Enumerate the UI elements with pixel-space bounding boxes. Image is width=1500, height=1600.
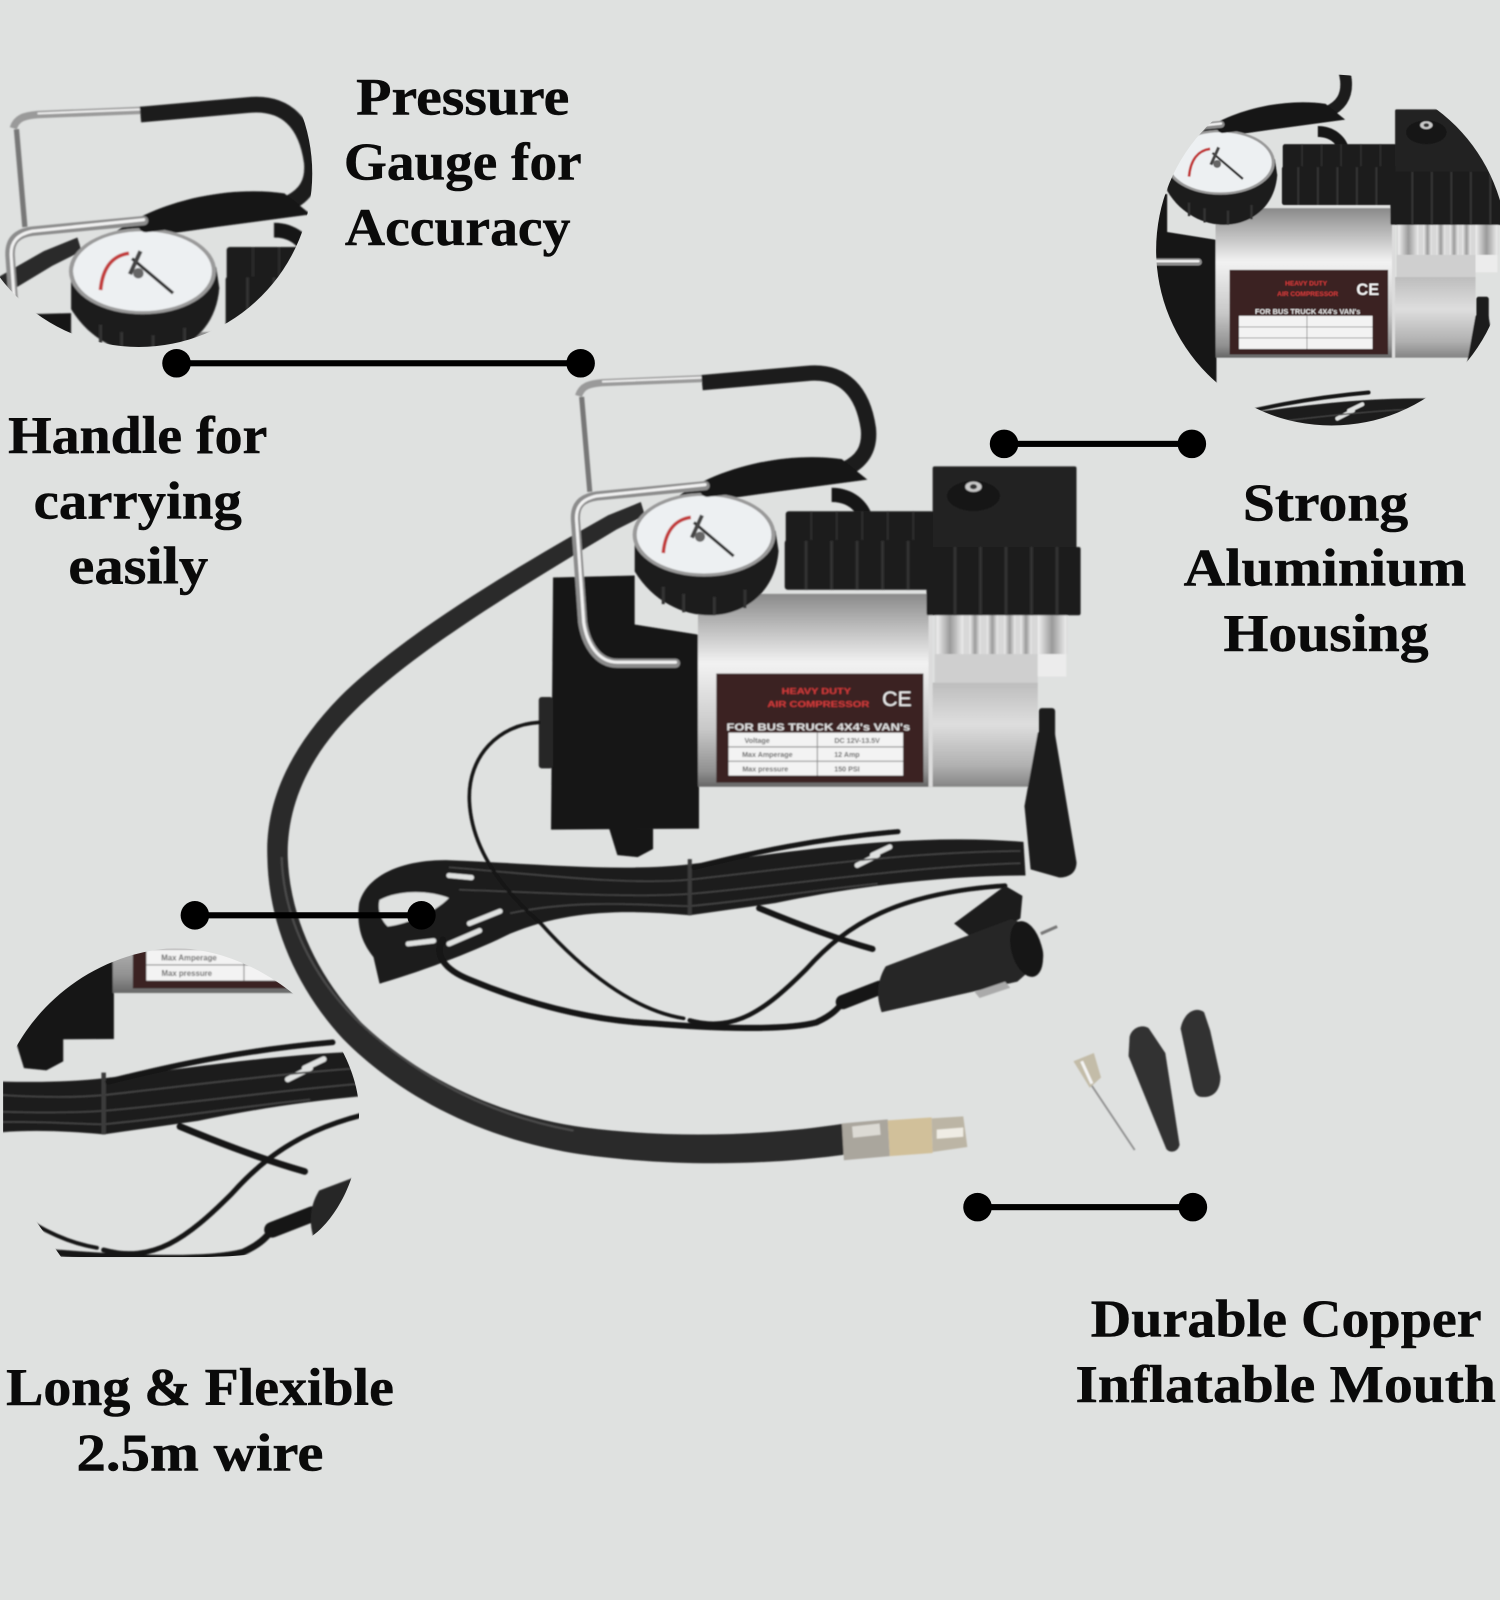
- connector line: housing: [990, 430, 1206, 458]
- black rubber grip, back: [786, 511, 935, 546]
- connector line: wire: [181, 901, 436, 930]
- label: handle: Handle for: [8, 407, 267, 465]
- upper handle: [579, 373, 869, 492]
- label: copper mouth: Durable Copper: [1091, 1291, 1482, 1349]
- tapered nozzle adapter: [1129, 1026, 1180, 1152]
- hose brass connector: [842, 1116, 967, 1160]
- label: handle: easily: [68, 538, 208, 596]
- label: wire: 2.5m wire: [77, 1424, 323, 1482]
- cooling fins and collar: [935, 615, 1067, 683]
- label: aluminium housing: Housing: [1223, 605, 1429, 663]
- air hose: [267, 502, 849, 1163]
- inset circle: cable close-up: Max Amperage: [161, 953, 217, 962]
- pressure gauge: [633, 493, 779, 615]
- spec label text: 12 Amp: [834, 751, 860, 759]
- spec label text: Max pressure: [742, 765, 788, 773]
- inset circle: aluminium housing close-up: [1156, 74, 1500, 426]
- compressor air chuck: [1024, 708, 1077, 878]
- spec label text: CE: [882, 687, 912, 711]
- label: copper mouth: Inflatable Mouth: [1076, 1356, 1496, 1414]
- spec label text: Max Amperage: [742, 751, 793, 759]
- spec label panel: [716, 673, 923, 783]
- power cable bundle: [358, 722, 1026, 1028]
- label: aluminium housing: [1184, 474, 1466, 663]
- aluminium cylinder: [698, 594, 1038, 787]
- inset circle: aluminium housing close-up: HEAVY DUTY: [1285, 281, 1328, 288]
- label: pressure gauge: Gauge for: [344, 134, 582, 192]
- inset circle: aluminium housing close-up: AIR COMPRESSOR: [1277, 291, 1338, 298]
- label: handle: [8, 407, 267, 596]
- cigarette lighter plug: [843, 886, 1057, 1012]
- label: aluminium housing: Strong: [1243, 474, 1408, 532]
- product photo: air compressor: [267, 373, 1220, 1163]
- inset circle: cable close-up: [3, 948, 360, 1258]
- spec label text: 150 PSI: [834, 765, 860, 773]
- connector line: copper mouth: [963, 1193, 1207, 1221]
- label: aluminium housing: Aluminium: [1184, 540, 1466, 598]
- lower handle with chrome leg: [575, 472, 846, 663]
- spec label text: HEAVY DUTY: [782, 686, 851, 696]
- rear pipe behind handle: [673, 457, 873, 520]
- black rubber grip, front: [785, 540, 935, 590]
- spec label text: Voltage: [745, 737, 770, 745]
- inset circle: aluminium housing close-up: FOR BUS TRUCK 4X4's VAN's: [1255, 307, 1360, 316]
- inset circle: aluminium housing close-up: CE: [1356, 281, 1379, 299]
- label: pressure gauge: Pressure: [356, 68, 569, 126]
- spec label text: [727, 686, 912, 773]
- short nozzle adapter: [1181, 1010, 1220, 1097]
- inset circle: cable close-up: Voltage: [164, 938, 192, 947]
- spec label text: DC 12V-13.5V: [834, 737, 880, 745]
- inflation needle: [1073, 1053, 1135, 1150]
- label: pressure gauge: Accuracy: [345, 199, 570, 257]
- spec label text: AIR COMPRESSOR: [767, 699, 870, 709]
- connector line: handle to gauge: [162, 349, 595, 378]
- spec label text: FOR BUS TRUCK 4X4's VAN's: [727, 723, 910, 734]
- label: handle: carrying: [34, 472, 242, 530]
- label: copper mouth: [1076, 1291, 1496, 1414]
- label: pressure gauge: [344, 68, 582, 257]
- inset circle: cable close-up: Max pressure: [161, 969, 213, 978]
- label: wire: [6, 1359, 394, 1482]
- label: wire: Long & Flexible: [6, 1359, 394, 1417]
- pump head block: [927, 466, 1081, 615]
- inset circle: gauge and handle close-up: [0, 96, 312, 347]
- motor housing: [539, 576, 699, 857]
